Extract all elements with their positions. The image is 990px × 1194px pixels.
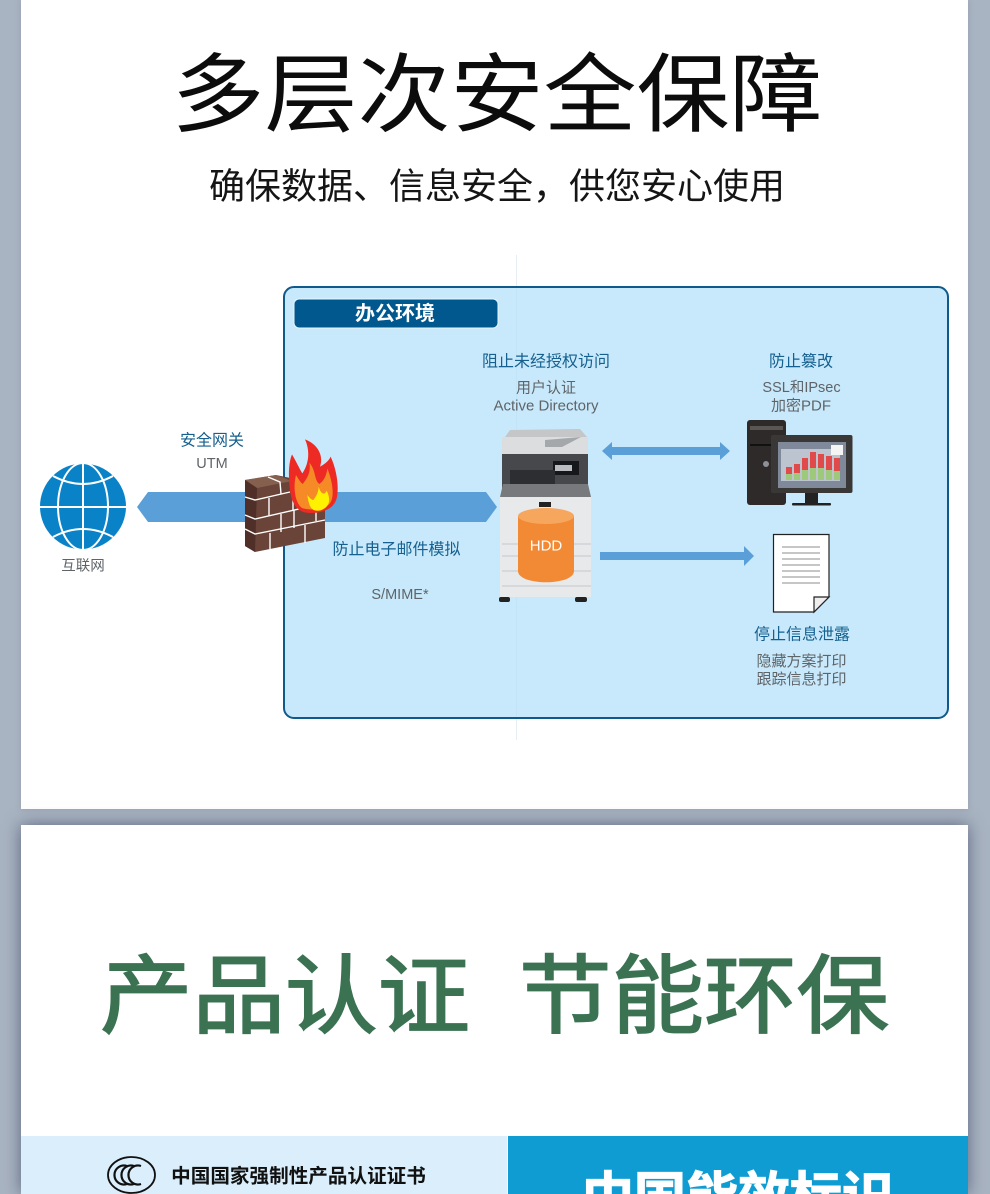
information leak text: 隐藏方案打印	[756, 652, 847, 670]
email protection text	[332, 540, 461, 603]
unauthorized access text: 阻止未经授权访问	[482, 352, 610, 370]
panel: CCC certificate	[21, 1136, 507, 1194]
heading: certification and energy saving: 产品认证	[100, 948, 470, 1044]
unauthorized access text: 用户认证	[516, 380, 576, 396]
panel: office environment	[284, 287, 948, 718]
panel: China energy label	[508, 1136, 968, 1194]
bar chart	[786, 452, 840, 480]
icon: multifunction printer	[499, 429, 591, 602]
information leak text: 跟踪信息打印	[756, 671, 847, 688]
email protection text: S/MIME*	[371, 587, 429, 603]
arrow: printer to document	[600, 546, 754, 566]
icon: internet globe	[40, 463, 126, 550]
heading: certification and energy saving: 节能环保	[519, 948, 889, 1044]
tamper protection text: 加密PDF	[771, 398, 831, 414]
gateway label: UTM	[196, 456, 228, 472]
tamper protection text	[762, 352, 841, 414]
brick wall	[245, 475, 325, 552]
flame	[289, 439, 338, 513]
information leak text: 停止信息泄露	[754, 626, 850, 644]
CCC certificate text: 中国国家强制性产品认证证书	[171, 1164, 426, 1188]
arrow: internet to office	[137, 492, 497, 522]
panel: bottom white section	[21, 825, 968, 1194]
title: 多层次安全保障	[172, 47, 822, 143]
panel: top white section	[21, 0, 968, 809]
icon: CCC mark	[108, 1157, 155, 1193]
icon: computer with chart	[747, 420, 852, 506]
office environment header: 办公环境	[355, 301, 435, 325]
icon: firewall	[245, 439, 338, 552]
arrow: printer to computer	[602, 442, 730, 460]
tamper protection text: SSL和IPsec	[762, 379, 841, 396]
information leak text	[754, 626, 850, 688]
HDD cylinder: HDD	[530, 538, 562, 554]
internet label: 互联网	[61, 558, 105, 574]
subtitle: 确保数据、信息安全，供您安心使用	[209, 166, 785, 206]
heading: certification and energy saving	[100, 948, 889, 1044]
tamper protection text: 防止篡改	[769, 352, 833, 370]
icon: document	[774, 534, 829, 612]
gateway label	[180, 432, 244, 472]
HDD cylinder	[518, 508, 574, 582]
unauthorized access text: Active Directory	[493, 398, 599, 414]
gateway label: 安全网关	[180, 432, 244, 450]
office environment header	[294, 299, 498, 328]
unauthorized access text	[482, 352, 610, 414]
email protection text: 防止电子邮件模拟	[332, 540, 461, 558]
